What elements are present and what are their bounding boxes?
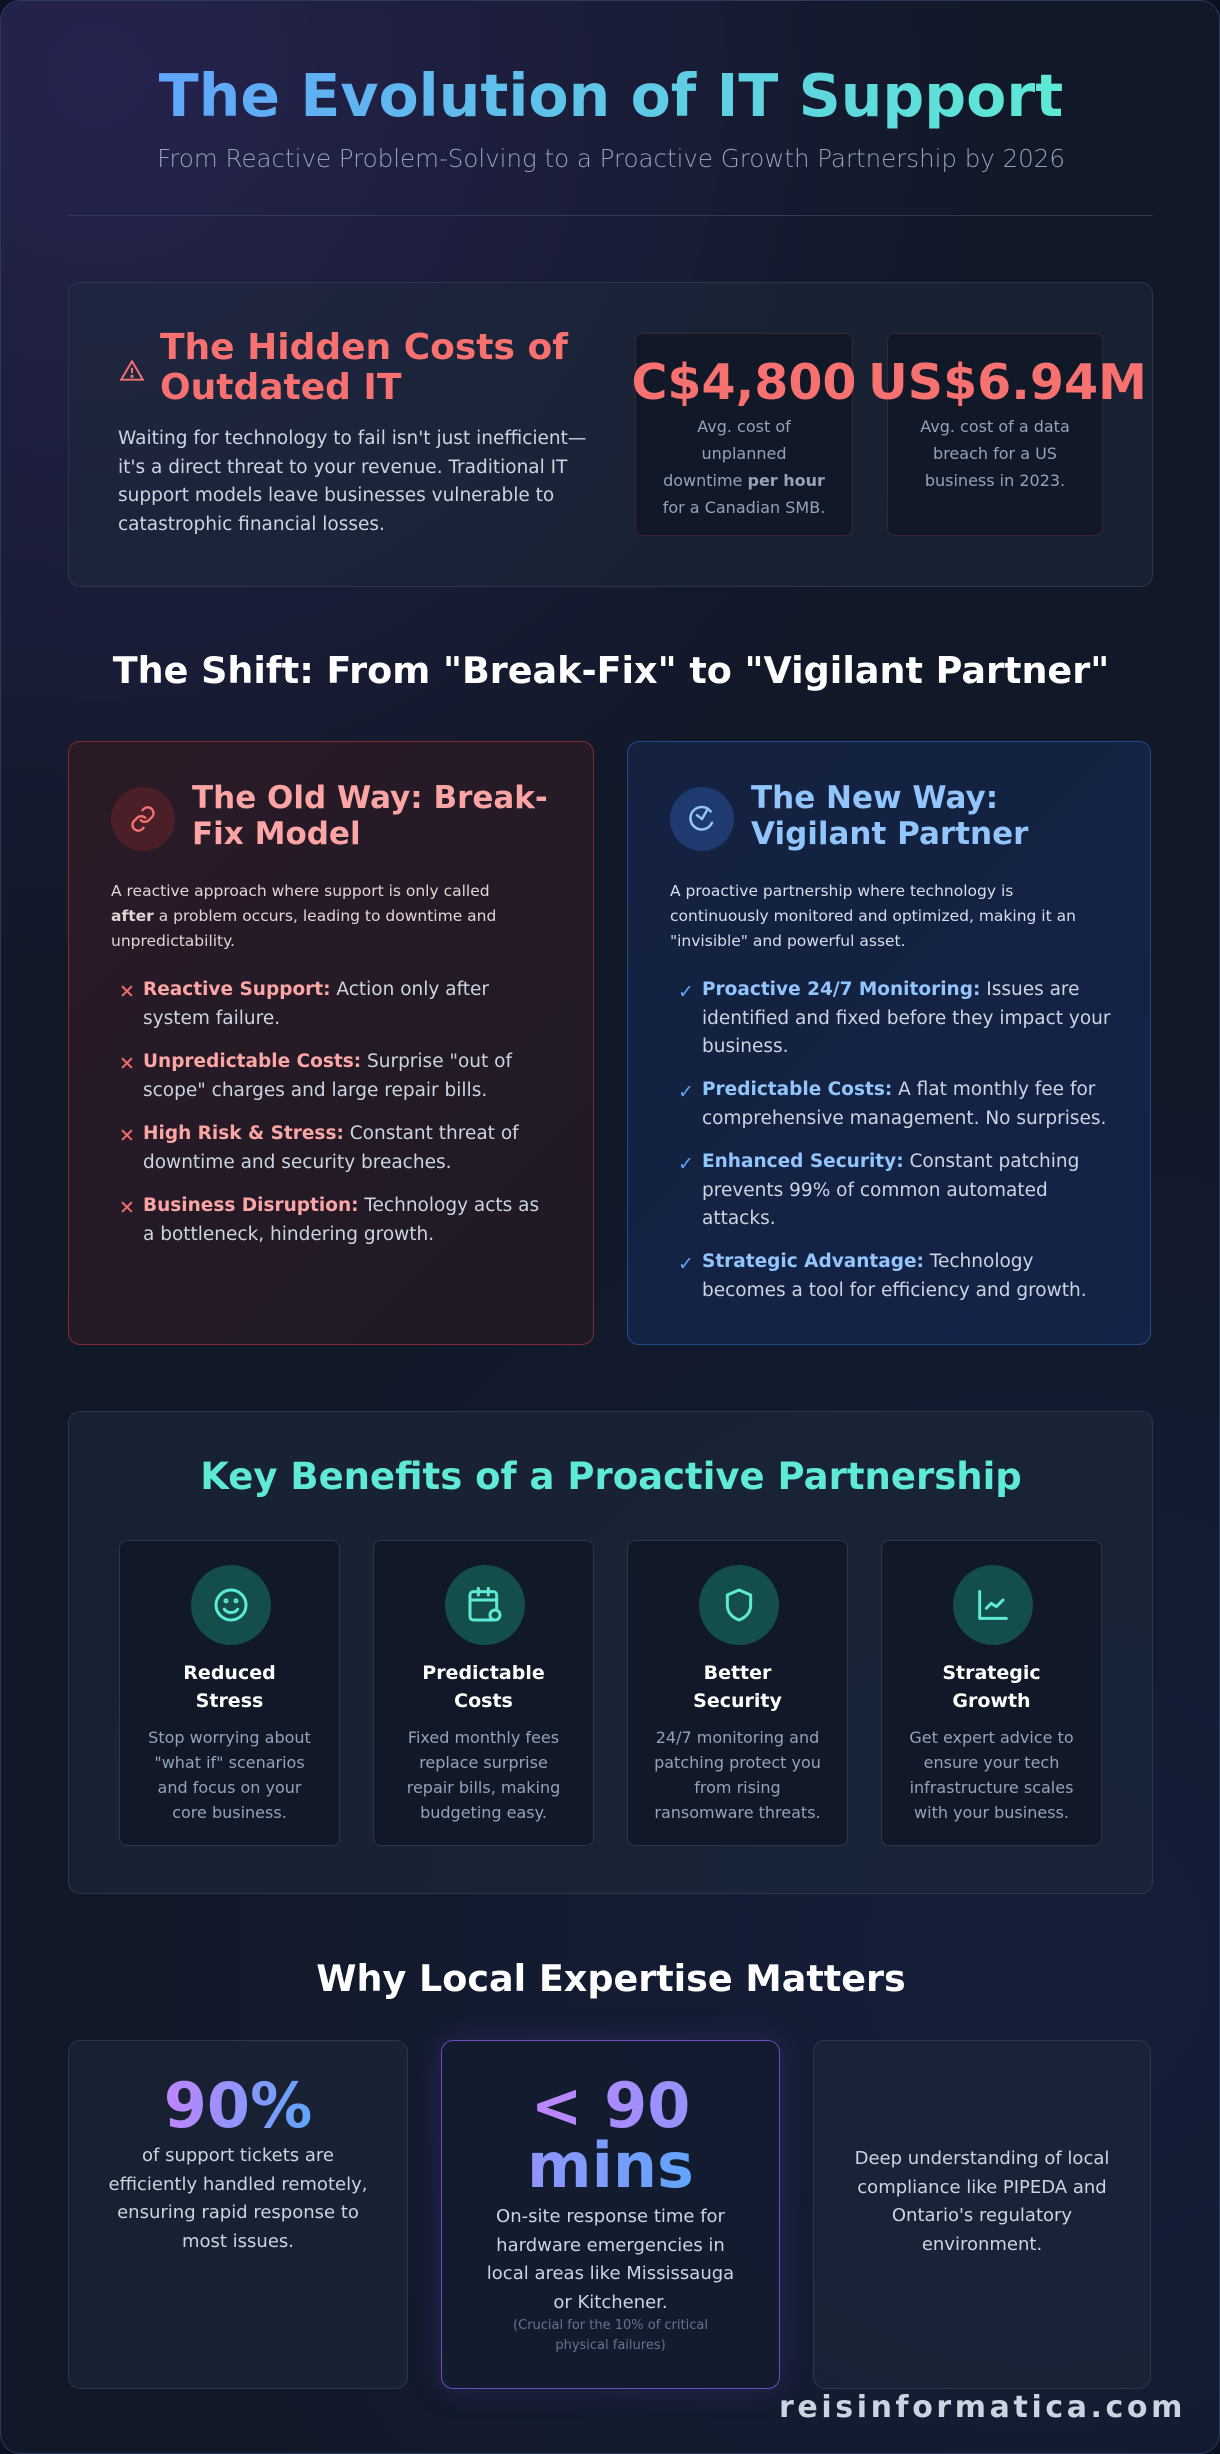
stat: breach cost: breach for a US: [933, 444, 1057, 463]
stat: downtime cost: downtime per hour: [663, 471, 825, 490]
icon: shield: [699, 1565, 779, 1645]
heading: key benefits: Key Benefits of a Proactive Partnership: [200, 1455, 1022, 1498]
card: reduced stress: Stop worrying about "what if" scenarios and focus on your core business.: [148, 1728, 311, 1822]
heading: hidden costs: The Hidden Costs of Outdated IT: [160, 327, 568, 408]
card: 90 mins onsite: (Crucial for the 10% of critical physical failures): [513, 2318, 708, 2353]
list: old way items: ✕: [119, 1053, 135, 1075]
list: new way items: Proactive 24/7 Monitoring: Issues are identified and fixed before they impact your business.: [702, 979, 1111, 1057]
card: 90% remote: [68, 2040, 408, 2389]
heading: local expertise: Why Local Expertise Matters: [316, 1957, 906, 2000]
panel: old way: [68, 741, 594, 1345]
list: old way items: High Risk & Stress: Constant threat of downtime and security breaches.: [143, 1123, 519, 1172]
list: new way items: ✓: [678, 1153, 694, 1175]
card: strategic growth: [881, 1540, 1102, 1846]
card: better security: [627, 1540, 848, 1846]
card: 90 mins onsite: [441, 2040, 780, 2389]
text block: hidden costs intro: Waiting for technology to fail isn't just inefficient—it's a direct threat to your revenue. Traditional IT support models leave businesses vulnerable to catastrophic financial losses.: [118, 428, 586, 534]
heading: old way: The Old Way: Break-Fix Model: [192, 780, 548, 852]
stat: breach cost: business in 2023.: [925, 471, 1065, 490]
panel: new way: [627, 741, 1151, 1345]
stat: breach cost: [887, 333, 1103, 536]
card: compliance: Deep understanding of local compliance like PIPEDA and Ontario's regulatory environment.: [855, 2148, 1109, 2254]
card: predictable costs: Costs: [454, 1690, 513, 1712]
card: 90 mins onsite: On-site response time for hardware emergencies in local areas like Mississauga or Kitchener.: [487, 2206, 734, 2312]
card: 90 mins onsite: mins: [527, 2129, 694, 2202]
card: 90 mins onsite: < 90: [531, 2069, 690, 2142]
icon: shield radar: [670, 787, 734, 851]
title: The Evolution of IT Support: [159, 62, 1063, 130]
card: 90% remote: of support tickets are efficiently handled remotely, ensuring rapid response to most issues.: [109, 2145, 367, 2252]
stat: breach cost: US$6.94M: [868, 354, 1147, 411]
stat: downtime cost: for a Canadian SMB.: [663, 498, 825, 517]
card: strategic growth: Get expert advice to ensure your tech infrastructure scales with your business.: [909, 1728, 1074, 1822]
card: better security: Security: [693, 1690, 782, 1712]
list: old way items: ✕: [119, 1125, 135, 1147]
icon: warning: [120, 360, 144, 381]
heading: new way: The New Way: Vigilant Partner: [751, 780, 1028, 852]
card: predictable costs: [373, 1540, 594, 1846]
card: predictable costs: Predictable: [422, 1662, 545, 1684]
panel: key benefits: [68, 1411, 1153, 1894]
list: new way items: Strategic Advantage: Technology becomes a tool for efficiency and growth.: [702, 1251, 1087, 1300]
icon: chart: [953, 1565, 1033, 1645]
icon: broken link: [111, 787, 175, 851]
card: reduced stress: [119, 1540, 340, 1846]
list: new way items: [678, 979, 1111, 1300]
card: better security: Better: [704, 1662, 771, 1684]
card: strategic growth: Growth: [952, 1690, 1031, 1712]
list: new way items: ✓: [678, 1253, 694, 1275]
card: strategic growth: Strategic: [942, 1662, 1041, 1684]
stat: downtime cost: Avg. cost of: [697, 417, 791, 436]
text block: old way description: A reactive approach where support is only called after a problem occurs, leading to downtime and unpredictability.: [111, 882, 496, 950]
list: old way items: Reactive Support: Action only after system failure.: [143, 979, 489, 1028]
card: better security: 24/7 monitoring and patching protect you from rising ransomware threats.: [654, 1728, 821, 1822]
card: reduced stress: Reduced: [183, 1662, 276, 1684]
stat: downtime cost: C$4,800: [631, 354, 857, 411]
list: old way items: ✕: [119, 1197, 135, 1219]
list: old way items: ✕: [119, 981, 135, 1003]
subtitle: From Reactive Problem-Solving to a Proactive Growth Partnership by 2026: [157, 144, 1065, 173]
list: old way items: [119, 979, 539, 1244]
stat: breach cost: Avg. cost of a data: [920, 417, 1070, 436]
list: new way items: ✓: [678, 1081, 694, 1103]
list: new way items: ✓: [678, 981, 694, 1003]
list: new way items: Enhanced Security: Constant patching prevents 99% of common automated attacks.: [702, 1151, 1079, 1229]
heading: the shift: The Shift: From "Break-Fix" to "Vigilant Partner": [113, 649, 1109, 692]
text block: new way description: A proactive partnership where technology is continuously monitored and optimized, making it an "invisible" and powerful asset.: [670, 882, 1076, 950]
footer: website: reisinformatica.com: [779, 2390, 1186, 2425]
stat: downtime cost: [635, 333, 853, 536]
list: new way items: Predictable Costs: A flat monthly fee for comprehensive management. No surprises.: [702, 1079, 1106, 1128]
icon: smile: [191, 1565, 271, 1645]
list: old way items: Business Disruption: Technology acts as a bottleneck, hindering growth.: [143, 1195, 539, 1244]
stat: downtime cost: unplanned: [702, 444, 786, 463]
icon: calendar: [445, 1565, 525, 1645]
card: predictable costs: Fixed monthly fees replace surprise repair bills, making budgeting easy.: [407, 1728, 560, 1822]
card: reduced stress: Stress: [196, 1690, 263, 1712]
panel: hidden costs: [68, 282, 1153, 587]
card: compliance: [813, 2040, 1151, 2389]
card: 90% remote: 90%: [164, 2069, 312, 2142]
list: old way items: Unpredictable Costs: Surprise "out of scope" charges and large repair bills.: [143, 1051, 512, 1100]
